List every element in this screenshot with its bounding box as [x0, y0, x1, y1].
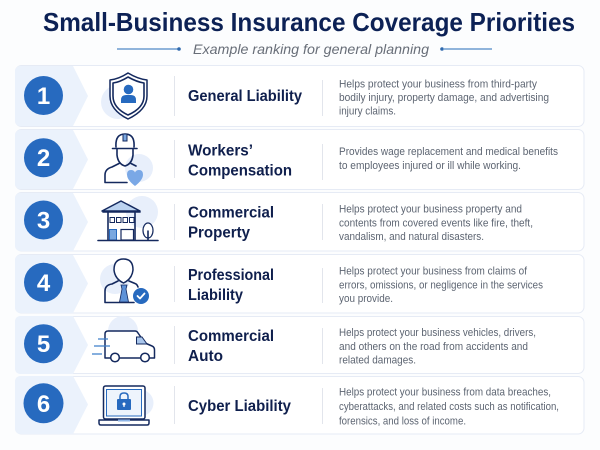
description: related damages.	[339, 354, 416, 366]
panel: 5 commercial auto	[15, 316, 584, 374]
number badge 4: 4	[37, 270, 51, 297]
coverage name	[188, 328, 274, 365]
description: Provides wage replacement and medical benefits	[339, 146, 559, 158]
number badge 3	[24, 200, 63, 240]
description: Helps protect your business property and	[339, 204, 522, 216]
panel: 3 commercial property	[15, 192, 584, 251]
description: you provide.	[339, 293, 393, 305]
coverage name: Property	[188, 225, 250, 242]
icon: laptop with padlock	[99, 386, 154, 425]
description: injury claims.	[339, 106, 396, 118]
description: Helps protect your business from data breaches,	[339, 387, 551, 399]
coverage name: Auto	[188, 348, 223, 365]
coverage name: Cyber Liability	[188, 398, 291, 415]
number badge 6: 6	[37, 391, 50, 418]
coverage name: Workers’	[188, 143, 253, 160]
subtitle	[117, 41, 492, 57]
icon: delivery van	[92, 316, 154, 362]
title: Small-Business Insurance Coverage Priorities	[43, 7, 575, 37]
panel: 1 general liability	[15, 66, 584, 126]
icon: shield with person	[101, 73, 147, 119]
description: errors, omissions, or negligence in the services	[339, 280, 544, 292]
description: and others on the road from accidents and	[339, 341, 528, 353]
coverage name	[188, 205, 274, 242]
icon: worker with heart	[105, 134, 153, 186]
coverage name: Liability	[188, 287, 243, 304]
description: contents from covered events like fire, theft,	[339, 218, 533, 230]
description	[339, 204, 533, 243]
icon: building and tree	[98, 196, 158, 240]
number badge 1: 1	[37, 83, 50, 110]
coverage name	[188, 267, 274, 304]
description: forensics, and loss of income.	[339, 415, 466, 427]
panel: 2 workers compensation	[15, 130, 584, 190]
coverage name	[188, 143, 292, 180]
number badge 2: 2	[37, 145, 50, 172]
description: vandalism, and natural disasters.	[339, 231, 484, 243]
icon: professional with check badge	[100, 259, 149, 304]
description: bodily injury, property damage, and advertising	[339, 92, 549, 104]
coverage name: General Liability	[188, 88, 302, 105]
panel: 4 professional liability	[15, 254, 584, 313]
description: to employees injured or ill while working.	[339, 160, 521, 172]
number badge 2	[24, 138, 63, 177]
description: cyberattacks, and related costs such as notification,	[339, 401, 559, 413]
coverage name: Commercial	[188, 205, 274, 222]
description	[339, 327, 536, 366]
subtitle: Example ranking for general planning	[193, 41, 429, 57]
number badge 5	[24, 324, 63, 363]
description	[339, 78, 549, 118]
coverage name: Commercial	[188, 328, 274, 345]
number badge 1	[24, 76, 63, 115]
number badge 3: 3	[37, 208, 50, 234]
number badge 4	[24, 263, 63, 302]
description: Helps protect your business from claims of	[339, 266, 528, 278]
number badge 5: 5	[37, 331, 50, 358]
coverage name: Professional	[188, 267, 274, 284]
coverage name: Compensation	[188, 163, 292, 180]
description: Helps protect your business vehicles, drivers,	[339, 327, 536, 339]
description	[339, 266, 544, 305]
description	[339, 387, 559, 427]
number badge 6	[24, 383, 64, 423]
panel: 6 cyber liability	[15, 376, 584, 434]
description: Helps protect your business from third-party	[339, 78, 538, 90]
description	[339, 146, 559, 172]
